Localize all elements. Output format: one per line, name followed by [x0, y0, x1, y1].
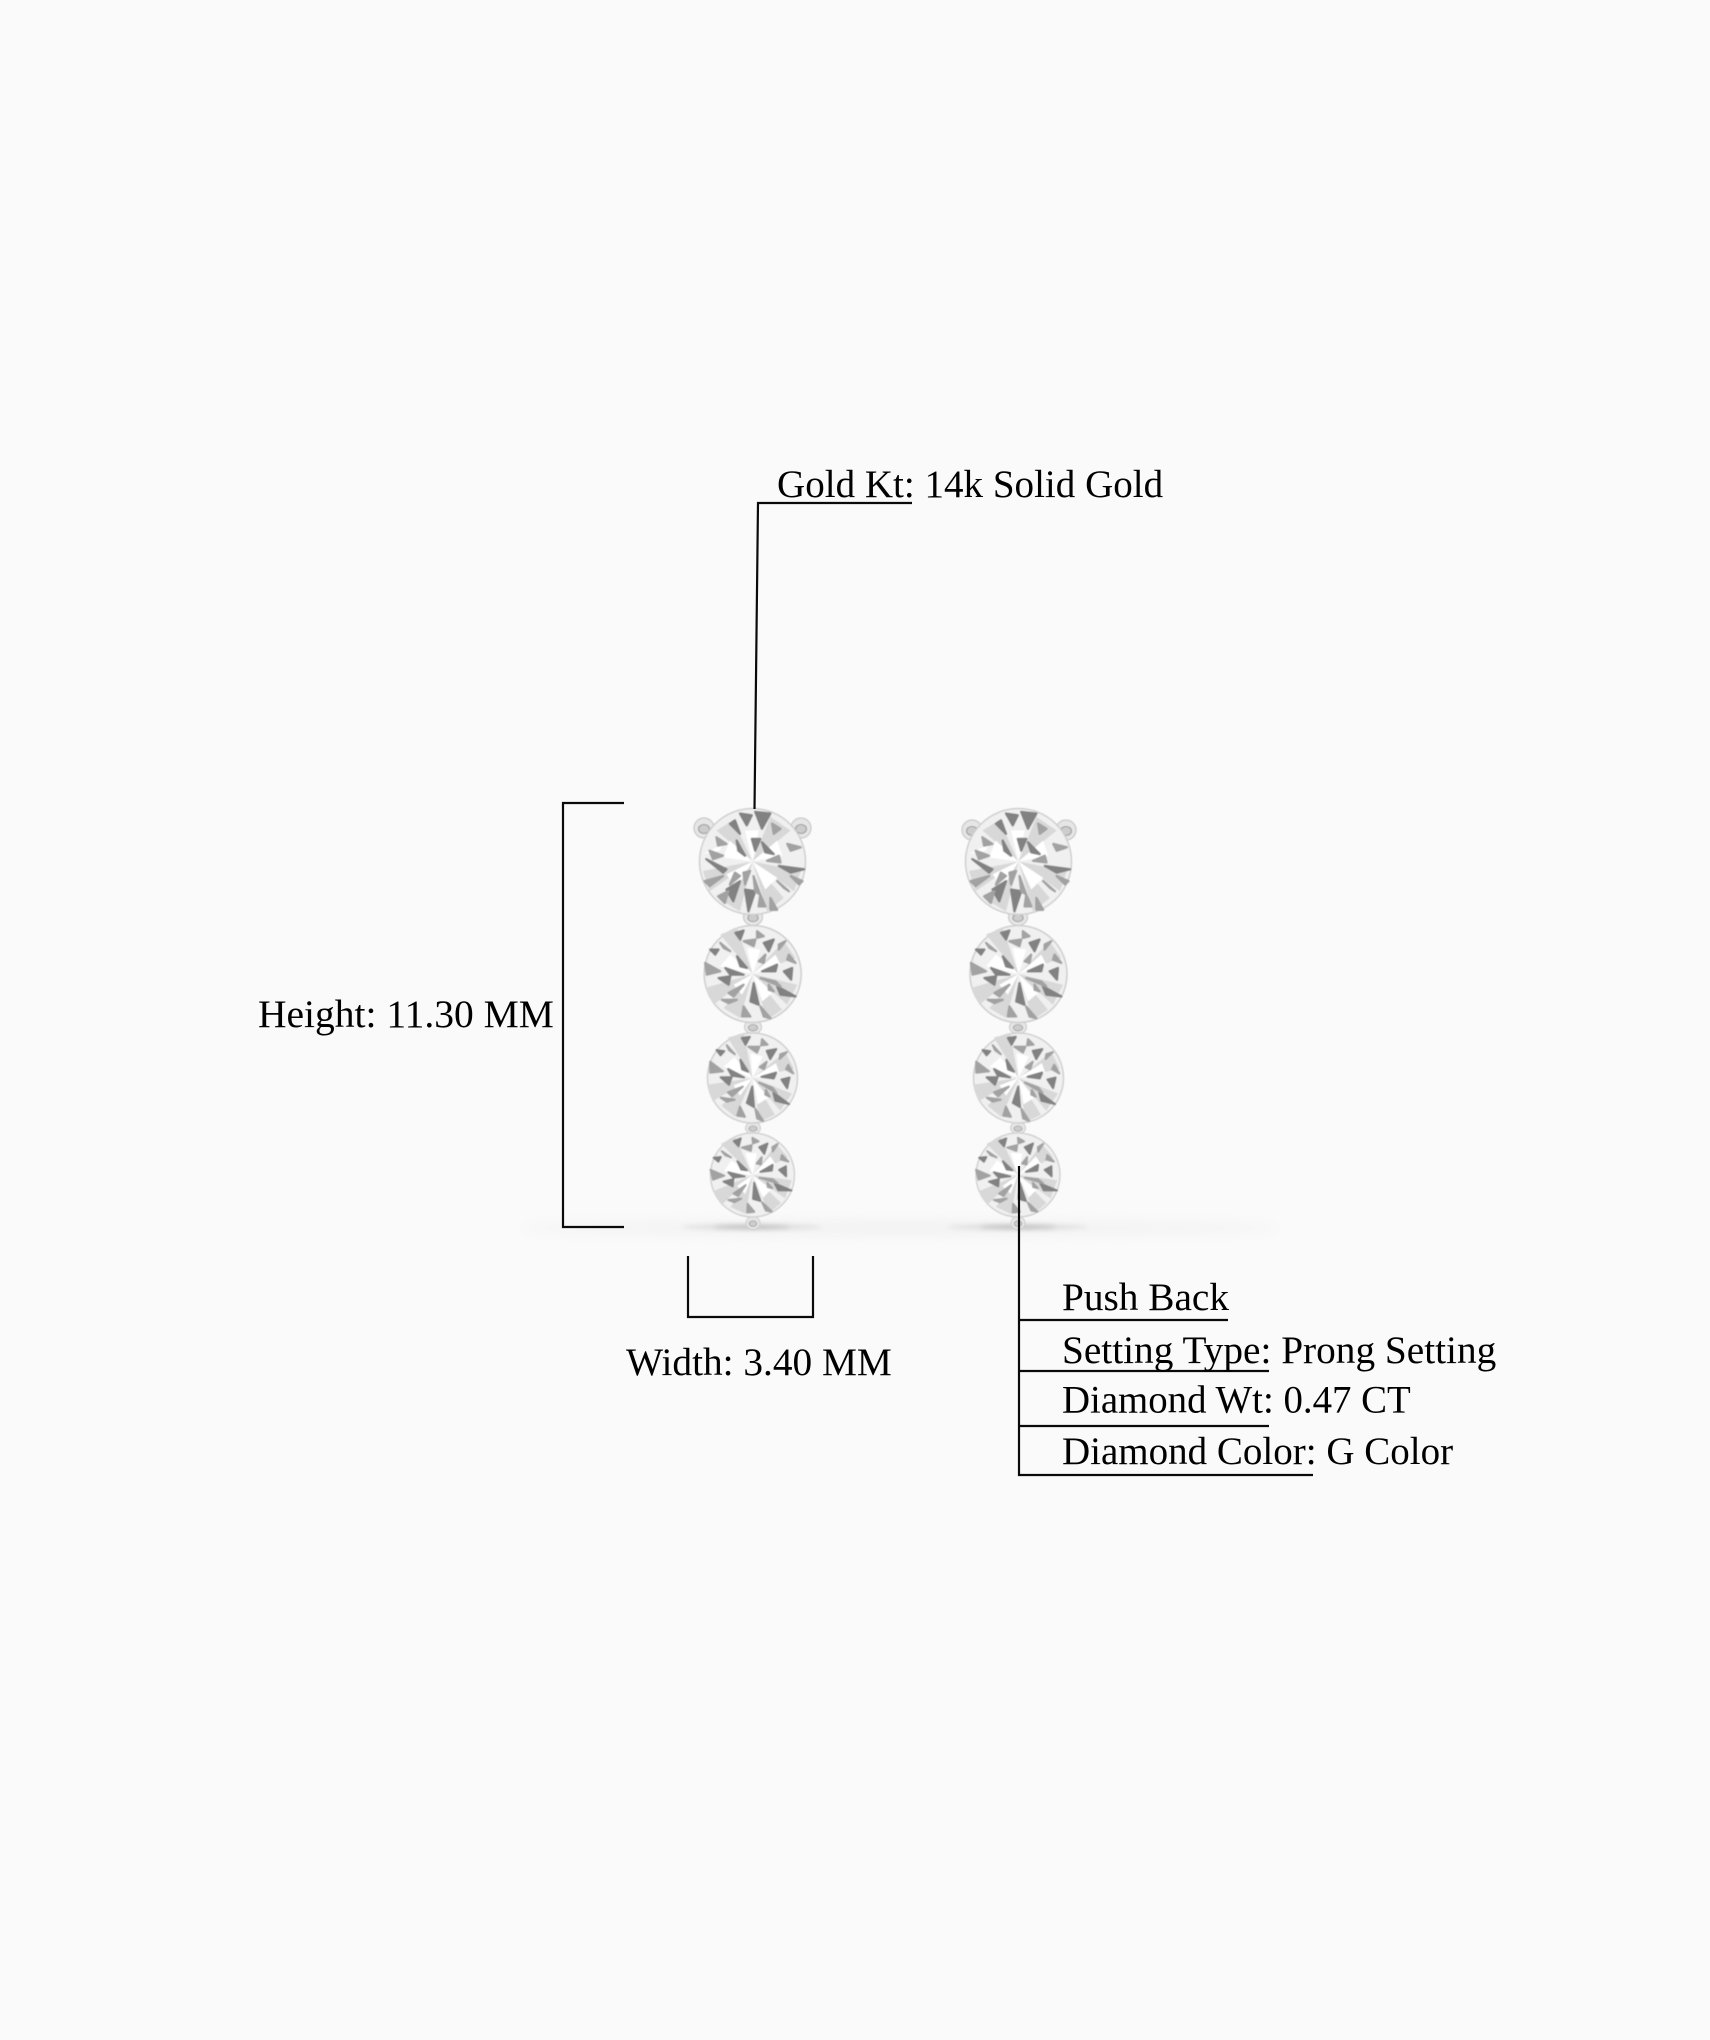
dimension: height [258, 803, 624, 1227]
text: diamond color: Diamond Color: G Color [1062, 1430, 1453, 1473]
callout: gold karat [754, 463, 1164, 809]
dimension: width [626, 1256, 892, 1384]
leader line: gold karat [754, 503, 912, 809]
callout: specification list [1019, 1166, 1496, 1475]
icon: left earring prongs [694, 818, 811, 1230]
text: push back: Push Back [1062, 1275, 1229, 1319]
icon: right earring prongs [962, 820, 1076, 1230]
text: setting type: Setting Type: Prong Setting [1062, 1328, 1496, 1372]
text: diamond weight: Diamond Wt: 0.47 CT [1062, 1378, 1411, 1422]
bracket: height [563, 803, 624, 1227]
icon: right earring diamonds [966, 808, 1072, 1221]
right earring [962, 808, 1076, 1230]
text: height: Height: 11.30 MM [258, 992, 554, 1036]
text: width: Width: 3.40 MM [626, 1340, 892, 1384]
ground shadow [520, 1223, 1280, 1233]
icon: left earring diamonds [700, 808, 806, 1221]
text: gold karat: Gold Kt: 14k Solid Gold [777, 463, 1164, 506]
bracket: width [688, 1256, 813, 1317]
left earring [694, 808, 811, 1230]
leader lines: specification list [1019, 1166, 1313, 1475]
